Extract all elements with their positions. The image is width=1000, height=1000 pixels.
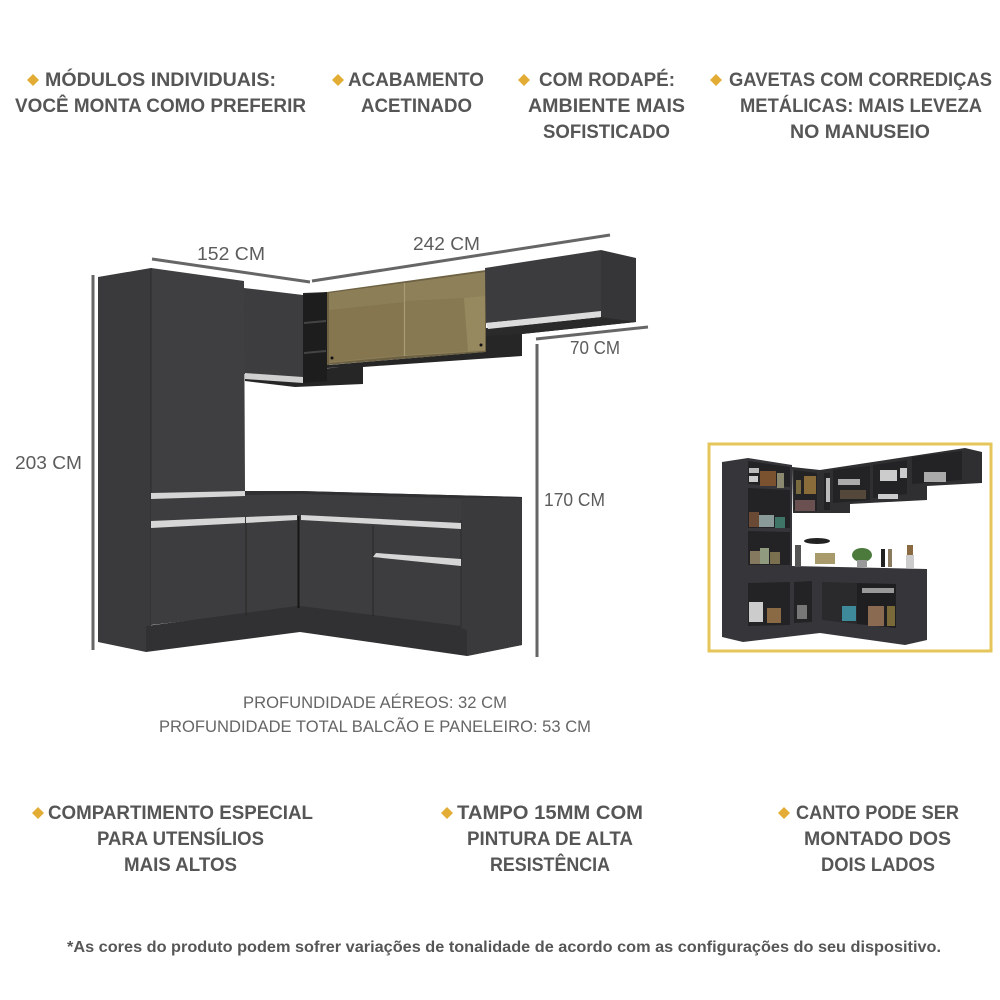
feature text: compartimento especial: COMPARTIMENTO ESPECIAL: [48, 803, 313, 824]
feature text: tampo 15mm: TAMPO 15MM COM: [457, 803, 643, 824]
feature text: tampo 15mm: PINTURA DE ALTA: [467, 829, 633, 850]
feature text: módulos individuais: [15, 69, 306, 117]
right upper door: [485, 250, 601, 323]
upper cabinets: shadow underside: [245, 292, 636, 387]
feature text: módulos individuais: MÓDULOS INDIVIDUAIS:: [45, 69, 276, 91]
tall cabinet side: [98, 268, 151, 652]
depth notes: PROFUNDIDADE AÉREOS: 32 CM: [243, 693, 507, 712]
feature text: com rodapé: AMBIENTE MAIS: [528, 96, 685, 117]
dimension line: 170 cm: 170 CM: [544, 490, 605, 510]
feature text: canto pode ser montado: CANTO PODE SER: [796, 803, 959, 824]
inset shelves interior: [748, 461, 790, 487]
depth notes: [159, 693, 591, 736]
tall cabinet front: [151, 268, 245, 495]
lower section base: [151, 491, 522, 656]
main kitchen illustration: [98, 250, 636, 656]
upper corner door: [244, 288, 303, 378]
inset: furnished kitchen photo: [709, 444, 991, 651]
inset countertop items: [795, 545, 801, 567]
feature text: gavetas com corrediças: GAVETAS COM CORREDIÇAS: [729, 70, 992, 91]
feature text: gavetas com corrediças: NO MANUSEIO: [790, 122, 930, 143]
inset cabinet structure: [722, 458, 927, 645]
feature text: tampo 15mm: [441, 803, 643, 876]
dimension line: 203 cm: 203 CM: [15, 453, 82, 473]
right side: [461, 498, 522, 656]
feature text: gavetas com corrediças: METÁLICAS: MAIS LEVEZA: [740, 95, 982, 117]
upper handles: [486, 311, 601, 329]
feature text: canto pode ser montado: MONTADO DOS: [804, 829, 951, 850]
glass doors: [327, 270, 486, 365]
dimension line: 242 cm: 242 CM: [413, 234, 480, 254]
lower door gaps: [245, 520, 247, 616]
feature text: acabamento acetinado: [332, 70, 484, 117]
feature text: módulos individuais: VOCÊ MONTA COMO PREFERIR: [15, 95, 306, 117]
feature text: com rodapé: [518, 69, 685, 143]
dimension line: 242 cm: [312, 234, 610, 281]
plinth: [146, 606, 467, 656]
lower handles: [151, 491, 245, 499]
feature text: gavetas com corrediças: [710, 70, 992, 143]
dimension line: 70 cm: 70 CM: [570, 338, 620, 358]
feature text: compartimento especial: MAIS ALTOS: [124, 855, 237, 876]
dimension line: 152 cm: 152 CM: [197, 244, 265, 264]
feature text: acabamento acetinado: ACETINADO: [361, 96, 472, 117]
footnote: *As cores do produto podem sofrer variações de tonalidade de acordo com as configurações do seu dispositivo.: [67, 939, 941, 956]
feature text: com rodapé: SOFISTICADO: [543, 122, 670, 143]
feature text: canto pode ser montado: DOIS LADOS: [821, 855, 935, 876]
feature text: tampo 15mm: RESISTÊNCIA: [490, 854, 610, 876]
feature text: acabamento acetinado: ACABAMENTO: [348, 70, 484, 91]
depth notes: PROFUNDIDADE TOTAL BALCÃO E PANELEIRO: 53 CM: [159, 716, 591, 736]
feature text: canto pode ser montado: [778, 803, 959, 876]
feature text: compartimento especial: [32, 803, 313, 876]
open niche: [303, 292, 327, 383]
feature text: com rodapé: COM RODAPÉ:: [539, 69, 675, 91]
dimension line: 152 cm: [152, 244, 310, 282]
inset items: [760, 471, 776, 486]
feature text: compartimento especial: PARA UTENSÍLIOS: [97, 828, 264, 850]
dimension line: 70 cm: [536, 327, 648, 358]
